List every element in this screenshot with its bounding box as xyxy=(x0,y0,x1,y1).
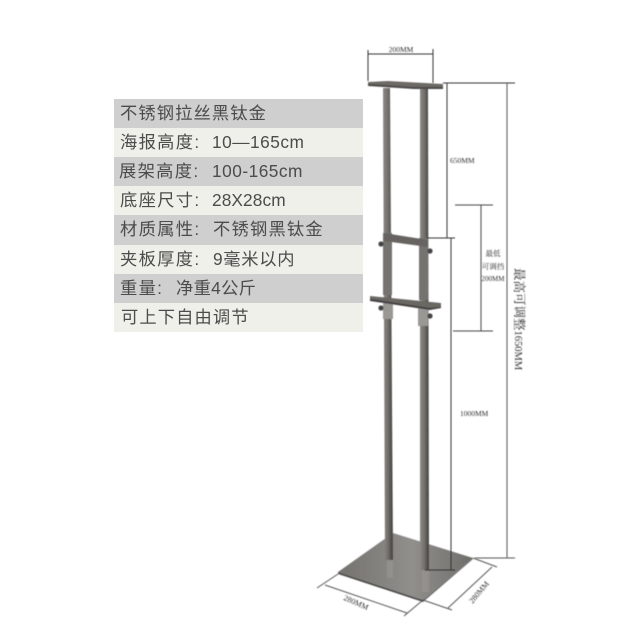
spec row: material: 材质属性: xyxy=(120,219,200,239)
dimension: adjustable 200MM: 200MM xyxy=(482,275,505,283)
icon: display stand xyxy=(338,81,473,602)
dimension: adjustable 200MM xyxy=(453,205,505,331)
spec row: weight: 净重4公斤 xyxy=(176,278,256,298)
panel: specification table xyxy=(114,99,363,332)
spec row: stand height: 100-165cm xyxy=(212,161,303,181)
spec row: board thickness: 夹板厚度: xyxy=(120,248,200,268)
dimension: base width 280MM xyxy=(423,558,497,610)
spec row: poster height: 10—165cm xyxy=(212,132,304,152)
dimension: 650MM: 650MM xyxy=(450,156,475,165)
dimension: top width 200MM xyxy=(368,45,433,83)
dimension: total height 1650MM xyxy=(475,83,527,558)
dimension: adjustable 200MM: 最低 xyxy=(486,249,501,258)
dimension: 1000MM xyxy=(425,238,489,570)
right post xyxy=(420,89,429,570)
spec row: poster height xyxy=(114,128,363,157)
left post xyxy=(383,88,393,560)
spec row: weight xyxy=(114,274,363,303)
spec row: material: 不锈钢黑钛金 xyxy=(213,219,324,239)
spec row: board thickness xyxy=(114,244,363,274)
dimension: adjustable 200MM: 可调挡 xyxy=(482,261,505,271)
top rail xyxy=(368,81,443,89)
spec row: adjustable: 可上下自由调节 xyxy=(121,307,250,327)
dimension: top width 200MM: 200MM xyxy=(389,45,414,54)
spec row: stand height xyxy=(114,157,363,186)
spec row: base size: 底座尺寸: xyxy=(120,190,200,210)
dimension: base depth 280MM: 280MM xyxy=(342,593,370,612)
dimension: total height 1650MM: 最高可调整 1650MM xyxy=(512,268,527,371)
stand base plate xyxy=(338,533,473,602)
spec row: product name xyxy=(114,99,363,128)
spec row: weight: 重量: xyxy=(120,278,163,298)
spec row: board thickness: 9毫米以内 xyxy=(213,248,295,268)
spec row: material xyxy=(114,215,363,245)
dimension: base width 280MM: 280MM xyxy=(467,579,491,605)
lower clamp shelf xyxy=(370,296,441,326)
dimension: 650MM xyxy=(443,83,515,238)
spec row: product name: 不锈钢拉丝黑钛金 xyxy=(120,103,267,123)
spec row: base size: 28X28cm xyxy=(212,190,286,210)
dimension: 1000MM: 1000MM xyxy=(460,409,489,418)
spec row: adjustable xyxy=(114,303,363,332)
dimension: base depth 280MM xyxy=(317,574,423,616)
spec row: base size xyxy=(114,186,363,215)
spec row: stand height: 展架高度: xyxy=(119,161,199,181)
upper clamp xyxy=(378,233,433,300)
spec row: poster height: 海报高度: xyxy=(120,132,200,152)
